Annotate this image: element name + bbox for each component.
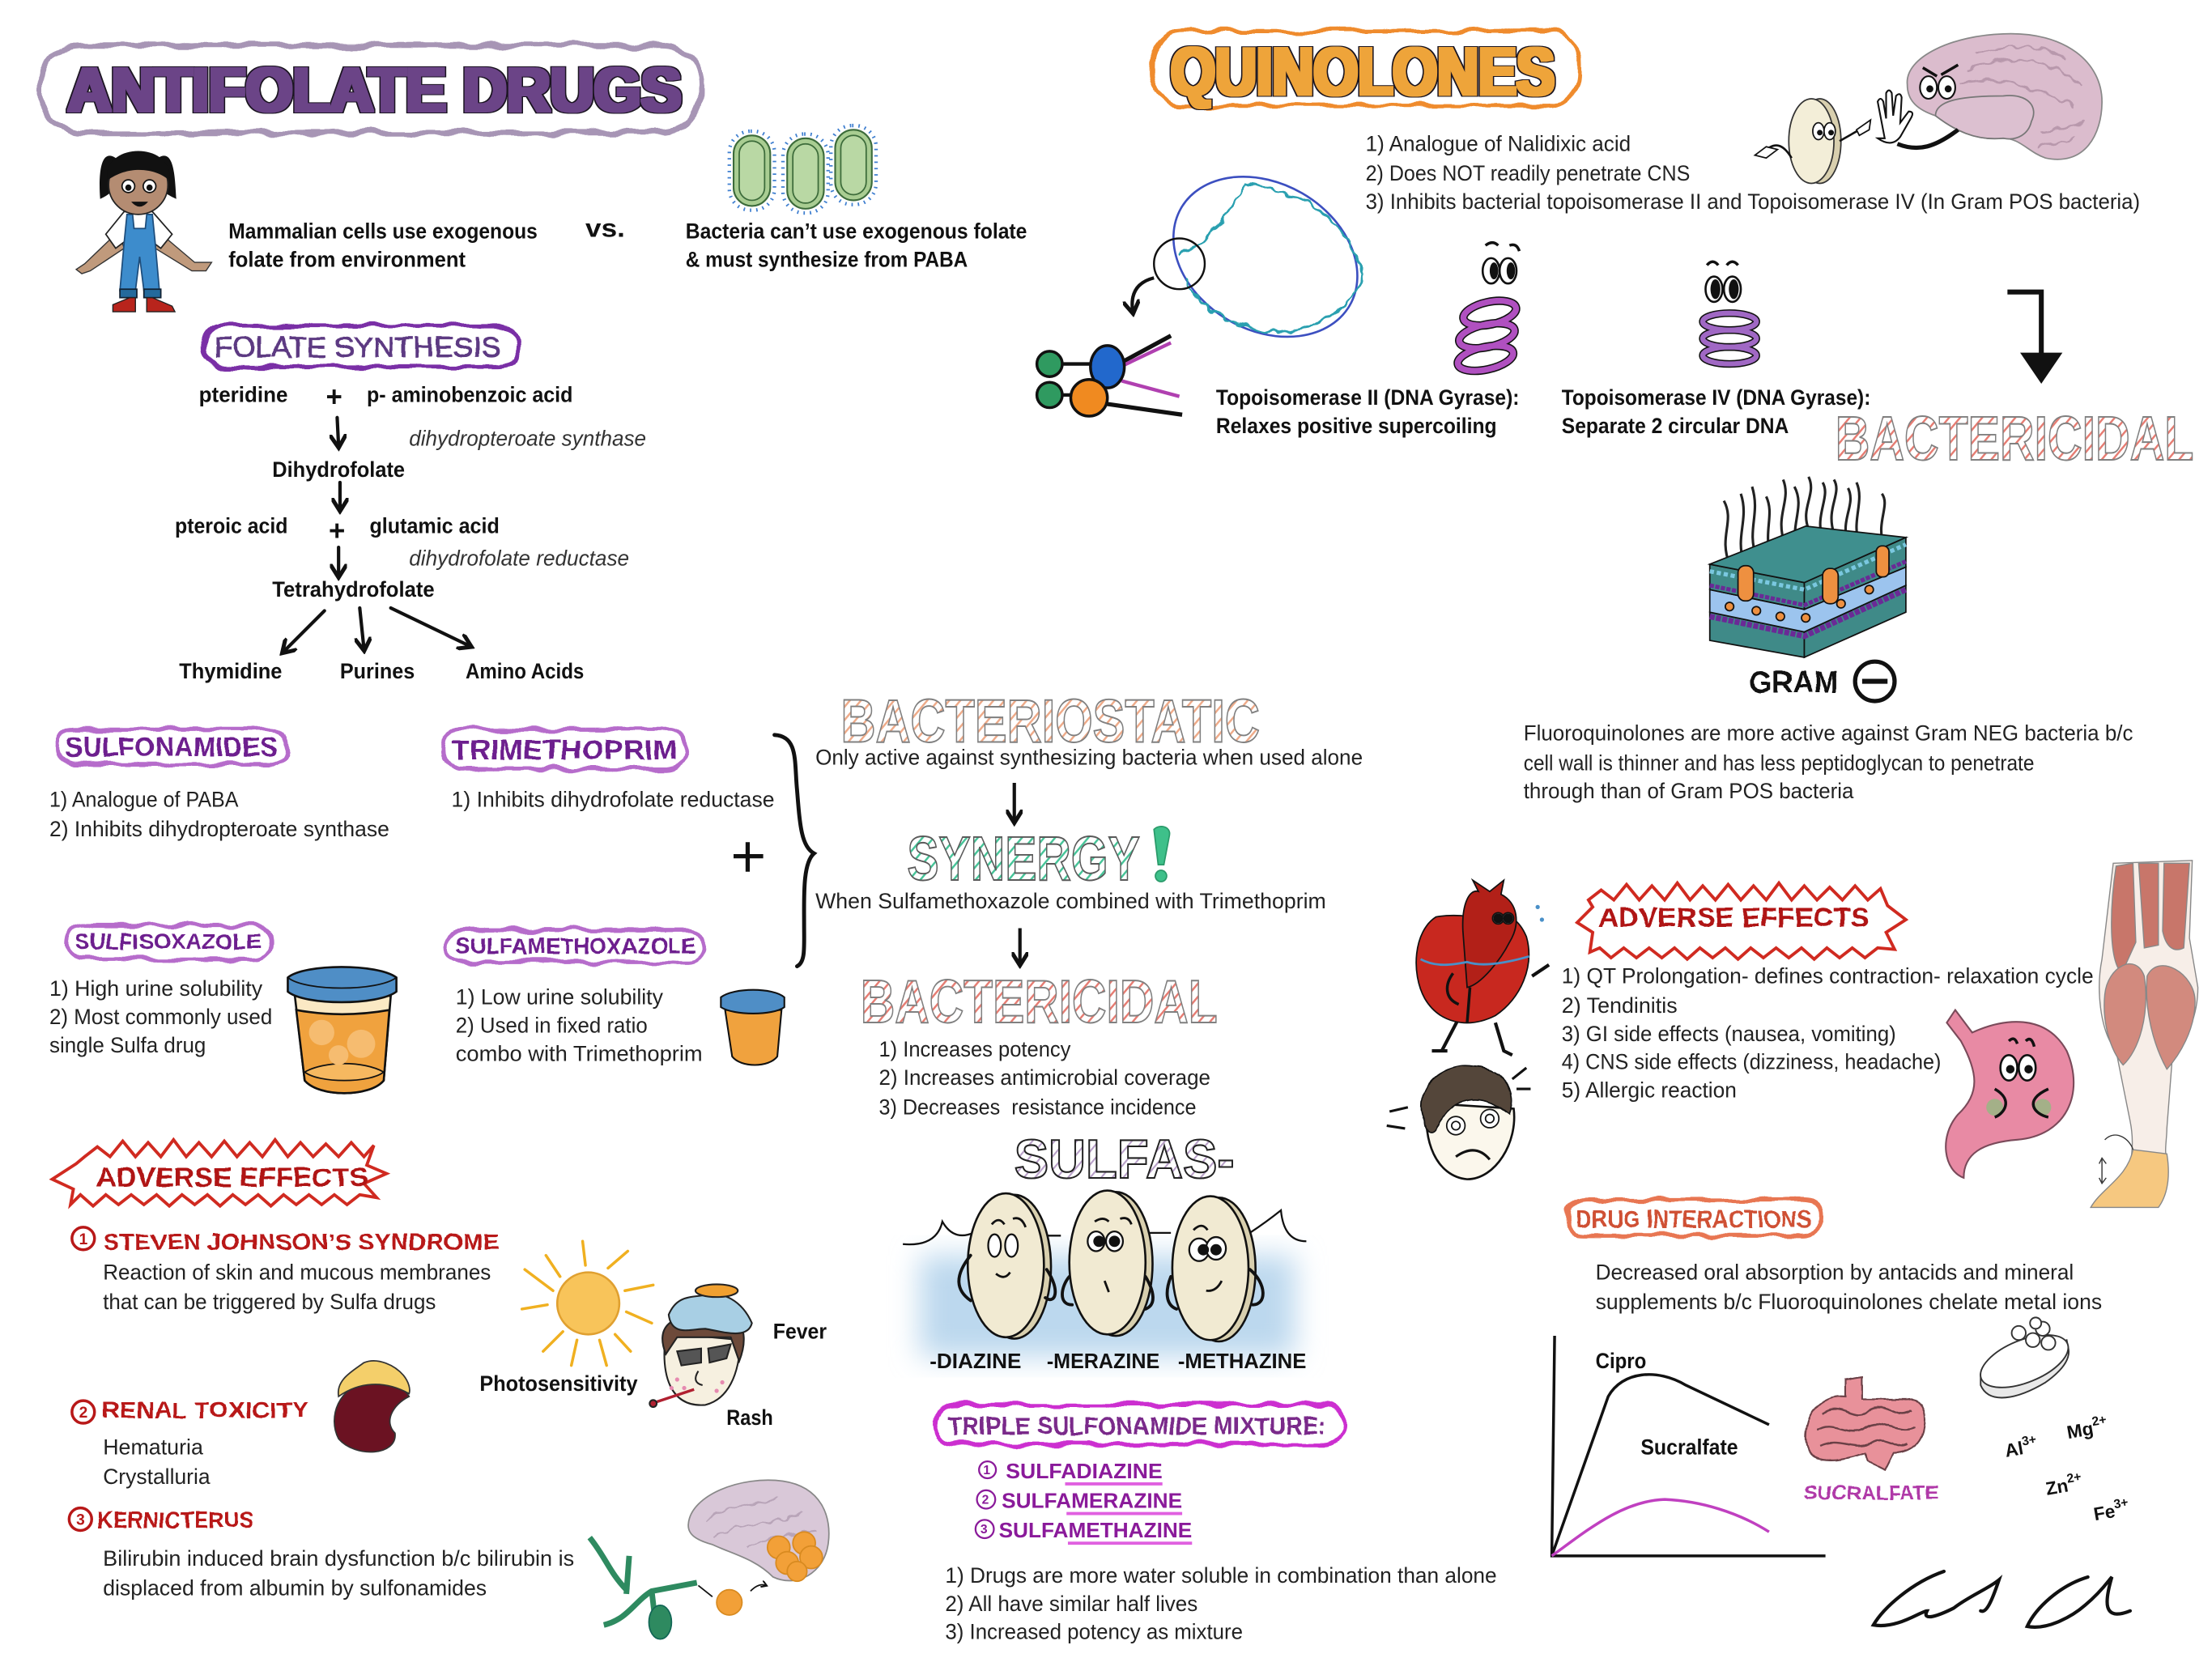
labels: sulfa suffixes: -METHAZINE xyxy=(1178,1349,1306,1373)
text: topoisomerase labels: Relaxes positive supercoiling xyxy=(1216,414,1497,438)
labels: metal ions: 3+ xyxy=(2021,1433,2037,1449)
text: sulfonamides points: 1) Analogue of PABA xyxy=(49,788,238,812)
text: sulfisoxazole points: 2) Most commonly used xyxy=(49,1005,272,1029)
text: fluoroquinolones note xyxy=(1524,721,2133,803)
icon: pill stopped by brain xyxy=(1755,34,2102,184)
heading: adverse effects left: ADVERSE EFFECTS xyxy=(96,1163,368,1192)
heading: triple sulfonamide mixture xyxy=(935,1405,1344,1444)
illustration: gram negative cell wall xyxy=(1710,477,1906,657)
icon: gyrase enzyme complex xyxy=(1037,336,1182,416)
diagram: folate synthesis pathway xyxy=(175,381,646,683)
text: quinolone adverse effects: 4) CNS side effects (dizziness, headache) xyxy=(1562,1050,1941,1074)
heading: adverse effects right xyxy=(1577,883,1906,959)
diagram: folate synthesis pathway: dihydrofolate reductase xyxy=(409,546,629,571)
symbol: plus xyxy=(734,842,764,872)
chart: cipro vs sucralfate absorption xyxy=(1552,1336,1826,1556)
label: gram negative: GRAM xyxy=(1750,665,1838,700)
text: mixture notes: 1) Drugs are more water soluble in combination than alone xyxy=(945,1563,1497,1588)
heading: trimethoprim: TRIMETHOPRIM xyxy=(452,735,677,765)
section: renal toxicity: 2 xyxy=(79,1405,87,1422)
section: kernicterus: Bilirubin induced brain dysfunction b/c bilirubin is xyxy=(103,1546,574,1571)
icon: sick face xyxy=(649,1284,752,1407)
arrow: to bactericidal xyxy=(1019,928,1021,963)
arrow: to bactericidal right xyxy=(2007,292,2062,384)
text: fluoroquinolones note: cell wall is thinner and has less peptidoglycan to penetrate xyxy=(1524,750,2034,775)
text: quinolone adverse effects xyxy=(1562,963,2094,1103)
section: kernicterus: KERNICTERUS xyxy=(97,1507,254,1533)
chart: cipro vs sucralfate absorption: Sucralfate xyxy=(1640,1435,1738,1459)
heading: folate synthesis xyxy=(203,326,519,367)
icon: liver ducts and bilirubin xyxy=(589,1537,766,1639)
section: steven johnson's syndrome: Reaction of skin and mucous membranes xyxy=(103,1260,491,1284)
labels: fever rash photosensitivity: Photosensitivity xyxy=(479,1371,638,1396)
labels: metal ions: 3+ xyxy=(2112,1495,2129,1511)
diagram: folate synthesis pathway: pteroic acid xyxy=(175,514,287,538)
text: combination benefits: 1) Increases potency xyxy=(878,1037,1071,1061)
text: mammalian cells: Mammalian cells use exogenous xyxy=(228,219,538,243)
heading: sulfisoxazole: SULFISOXAZOLE xyxy=(74,929,261,954)
text: topoisomerase labels xyxy=(1216,385,1870,438)
icon: dizzy head xyxy=(1387,1065,1530,1180)
text: sulfonamides points: 2) Inhibits dihydropteroate synthase xyxy=(49,817,389,841)
text: combination benefits: 3) Decreases resistance incidence xyxy=(878,1095,1197,1119)
text: topoisomerase labels: Topoisomerase IV (DNA Gyrase): xyxy=(1562,385,1870,410)
labels: fever rash photosensitivity xyxy=(479,1320,827,1430)
diagram: folate synthesis pathway: dihydropteroate synthase xyxy=(409,427,646,451)
list: triple sulfonamide drugs: 3 xyxy=(981,1523,988,1537)
labels: sulfa suffixes xyxy=(929,1349,1306,1373)
labels: sulfa suffixes: -DIAZINE xyxy=(929,1349,1021,1373)
chart: cipro vs sucralfate absorption: Cipro xyxy=(1596,1349,1646,1373)
icon: kidney xyxy=(334,1361,410,1452)
text: fluoroquinolones note: through than of Gram POS bacteria xyxy=(1524,779,1854,803)
diagram: folate synthesis pathway: Thymidine xyxy=(179,659,282,683)
list: triple sulfonamide drugs: SULFAMERAZINE xyxy=(1002,1489,1182,1513)
text: mixture notes xyxy=(945,1563,1497,1644)
heading: sulfonamides: SULFONAMIDES xyxy=(65,733,278,763)
icon: intestines xyxy=(1806,1377,1925,1470)
text: quinolones points: 1) Analogue of Nalidixic acid xyxy=(1366,131,1631,155)
text: sulfonamides points xyxy=(49,788,389,841)
section: kernicterus: 3 xyxy=(76,1511,85,1528)
heading: drug interactions xyxy=(1568,1199,1821,1235)
label: sucralfate: SUCRALFATE xyxy=(1804,1482,1938,1504)
text: combination benefits: 2) Increases antimicrobial coverage xyxy=(878,1065,1210,1090)
text: quinolone adverse effects: 3) GI side effects (nausea, vomiting) xyxy=(1562,1022,1896,1046)
list: triple sulfonamide drugs: SULFAMETHAZINE xyxy=(999,1518,1192,1542)
text: bacteria folate xyxy=(686,219,1027,271)
text: mammalian cells: folate from environment xyxy=(228,247,466,271)
icon: leg with calf muscles xyxy=(2091,861,2198,1207)
heading: bacteriostatic: BACTERIOSTATIC xyxy=(840,687,1260,755)
text: sulfisoxazole points: 1) High urine solubility xyxy=(49,976,263,1001)
section: kernicterus xyxy=(69,1507,574,1601)
text: fluoroquinolones note: Fluoroquinolones are more active against Gram NEG bacteria b/c xyxy=(1524,721,2133,746)
icon: brain with bilirubin xyxy=(688,1480,829,1581)
labels: metal ions xyxy=(2003,1413,2131,1524)
section: renal toxicity: Crystalluria xyxy=(103,1465,211,1489)
text: mammalian cells xyxy=(228,219,538,271)
title: Quinolones: QUINOLONES xyxy=(1171,33,1555,109)
list: triple sulfonamide drugs: SULFADIAZINE xyxy=(1006,1459,1163,1483)
text: drug interaction note: Decreased oral absorption by antacids and mineral xyxy=(1596,1260,2074,1284)
diagram: folate synthesis pathway: glutamic acid xyxy=(369,514,500,538)
section: steven johnson's syndrome xyxy=(72,1227,500,1314)
section: renal toxicity: Hematuria xyxy=(103,1435,204,1459)
icon: effervescent antacid tablet xyxy=(1973,1317,2075,1398)
heading: adverse effects right: ADVERSE EFFECTS xyxy=(1598,903,1870,933)
text: topoisomerase labels: Topoisomerase II (DNA Gyrase): xyxy=(1216,385,1520,410)
diagram: folate synthesis pathway: + xyxy=(329,515,345,546)
diagram: folate synthesis pathway: + xyxy=(325,381,342,413)
illustration: three sulfa pills xyxy=(903,1191,1306,1357)
label: vs: vs. xyxy=(585,215,625,243)
text: quinolones points: 2) Does NOT readily penetrate CNS xyxy=(1366,161,1690,185)
text: sulfisoxazole points xyxy=(49,976,272,1057)
text: quinolones points xyxy=(1366,131,2140,214)
text: drug interaction note: supplements b/c Fluoroquinolones chelate metal ions xyxy=(1596,1290,2102,1314)
list: triple sulfonamide drugs: 2 xyxy=(982,1493,989,1507)
labels: metal ions: Mg xyxy=(2065,1418,2095,1443)
text: combination benefits xyxy=(878,1037,1210,1119)
labels: fever rash photosensitivity: Fever xyxy=(773,1320,827,1344)
text: mixture notes: 3) Increased potency as mixture xyxy=(945,1620,1243,1644)
heading: sulfas: SULFAS- xyxy=(1015,1129,1235,1190)
diagram: folate synthesis pathway: Tetrahydrofolate xyxy=(272,577,435,602)
labels: metal ions: 2+ xyxy=(2065,1470,2082,1486)
section: steven johnson's syndrome: that can be triggered by Sulfa drugs xyxy=(103,1290,436,1314)
diagram: circular DNA xyxy=(1132,145,1386,369)
section: steven johnson's syndrome: STEVEN JOHNSON’S SYNDROME xyxy=(103,1230,500,1255)
labels: sulfa suffixes: -MERAZINE xyxy=(1047,1349,1159,1373)
text: drug interaction note xyxy=(1596,1260,2102,1314)
diagram: folate synthesis pathway: p- aminobenzoic acid xyxy=(367,383,572,407)
heading: bactericidal center: BACTERICIDAL xyxy=(861,967,1218,1035)
list: triple sulfonamide drugs: 1 xyxy=(983,1464,990,1477)
labels: metal ions: Al xyxy=(2003,1437,2025,1461)
labels: fever rash photosensitivity: Rash xyxy=(726,1405,773,1430)
text: sulfamethoxazole points xyxy=(456,985,703,1065)
section: renal toxicity xyxy=(72,1397,309,1489)
heading: adverse effects left xyxy=(52,1140,386,1206)
section: kernicterus: displaced from albumin by sulfonamides xyxy=(103,1576,487,1601)
text: sulfisoxazole points: single Sulfa drug xyxy=(49,1033,206,1057)
text: sulfamethoxazole points: 1) Low urine solubility xyxy=(456,985,663,1010)
labels: metal ions: 2+ xyxy=(2091,1413,2108,1429)
text: sulfamethoxazole points: combo with Trimethoprim xyxy=(456,1041,703,1065)
text: trimethoprim point: 1) Inhibits dihydrofolate reductase xyxy=(452,788,775,812)
diagram: folate synthesis pathway: Purines xyxy=(340,659,415,683)
labels: metal ions: Fe xyxy=(2092,1500,2116,1524)
icon: sun xyxy=(522,1241,653,1366)
text: bacteria folate: & must synthesize from PABA xyxy=(686,247,968,271)
heading: drug interactions: DRUG INTERACTIONS xyxy=(1576,1206,1811,1233)
heading: sulfamethoxazole: SULFAMETHOXAZOLE xyxy=(456,933,696,959)
heading: sulfisoxazole xyxy=(66,925,271,959)
text: topoisomerase labels: Separate 2 circular DNA xyxy=(1562,414,1789,438)
heading: trimethoprim xyxy=(443,729,686,769)
text: sulfamethoxazole points: 2) Used in fixed ratio xyxy=(456,1013,648,1037)
diagram: folate synthesis pathway: Amino Acids xyxy=(466,659,584,683)
label: gram negative xyxy=(1750,661,1895,701)
icon: worried heart xyxy=(1416,880,1549,1055)
text: mixture notes: 2) All have similar half lives xyxy=(945,1592,1197,1616)
icon: rod bacteria xyxy=(730,125,876,213)
icon: large urine cup xyxy=(287,967,397,1093)
heading: synergy: SYNERGY xyxy=(907,825,1140,894)
text: bacteria folate: Bacteria can’t use exogenous folate xyxy=(686,219,1027,243)
section: steven johnson's syndrome: 1 xyxy=(79,1231,88,1248)
labels: metal ions: Zn xyxy=(2044,1474,2069,1499)
diagram: folate synthesis pathway: pteridine xyxy=(199,383,287,407)
text: bacteriostatic note: Only active against synthesizing bacteria when used alone xyxy=(815,745,1363,769)
diagram: folate synthesis pathway: Dihydrofolate xyxy=(272,457,405,482)
heading: folate synthesis: FOLATE SYNTHESIS xyxy=(215,332,501,363)
icon: topoisomerase II coil xyxy=(1456,243,1520,375)
symbol: curly brace xyxy=(775,735,814,967)
text: synergy note: When Sulfamethoxazole combined with Trimethoprim xyxy=(815,889,1326,913)
signature xyxy=(1874,1571,2130,1627)
text: quinolone adverse effects: 2) Tendinitis xyxy=(1562,993,1678,1018)
title: Antifolate Drugs: ANTIFOLATE DRUGS xyxy=(68,57,682,125)
text: quinolone adverse effects: 5) Allergic reaction xyxy=(1562,1078,1737,1103)
text: quinolones points: 3) Inhibits bacterial topoisomerase II and Topoisomerase IV (In Gram POS bacteria) xyxy=(1366,189,2140,214)
icon: girl in overalls xyxy=(76,151,211,312)
list: triple sulfonamide drugs xyxy=(976,1459,1192,1543)
icon: nauseous stomach xyxy=(1946,1010,2074,1178)
section: renal toxicity: RENAL TOXICITY xyxy=(101,1397,309,1422)
icon: small urine cup xyxy=(721,990,785,1065)
arrow: to synergy xyxy=(1014,783,1015,821)
icon: topoisomerase IV coil xyxy=(1703,261,1756,364)
heading: triple sulfonamide mixture: TRIPLE SULFONAMIDE MIXTURE: xyxy=(948,1412,1326,1440)
text: quinolone adverse effects: 1) QT Prolongation- defines contraction- relaxation cycle xyxy=(1562,963,2094,988)
